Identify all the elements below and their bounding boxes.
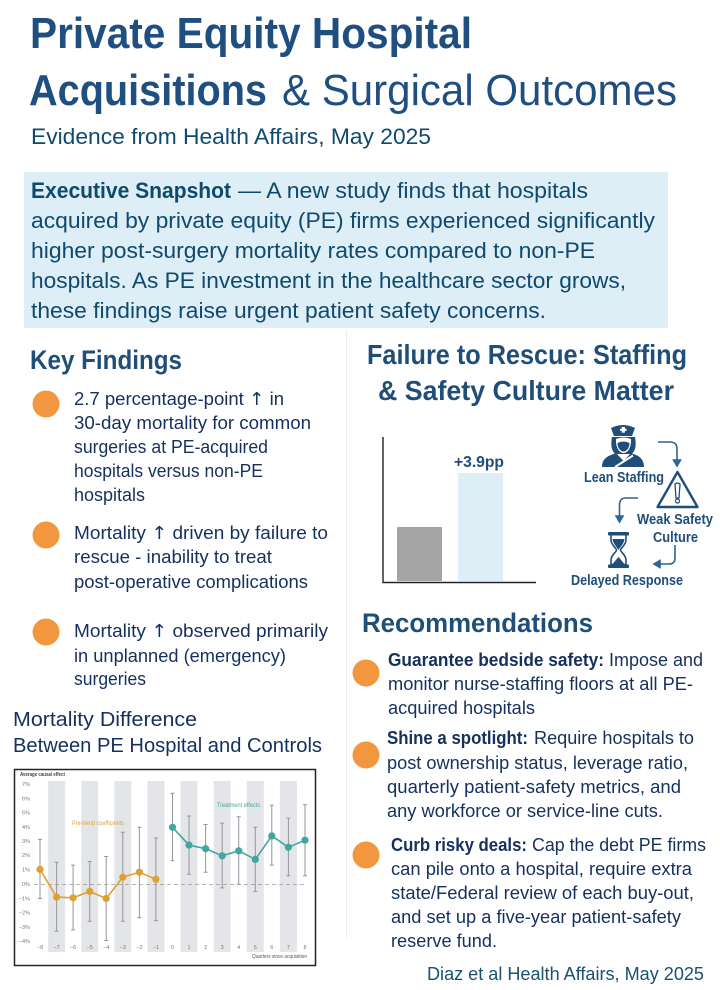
title: & Surgical Outcomes xyxy=(282,66,677,115)
y axis labels: −1% xyxy=(19,896,30,902)
panel: executive snapshot: acquired by private equity (PE) firms experienced significantly xyxy=(31,208,656,233)
series: treatment effects xyxy=(169,803,309,863)
diagram: failure to rescue cycle xyxy=(571,425,713,589)
recommendation 3: and set up a five-year patient-safety xyxy=(391,907,681,927)
y axis labels: 5% xyxy=(22,810,30,816)
error bars xyxy=(38,793,307,940)
line chart: average causal effect by quarter: Average causal effect xyxy=(20,772,65,778)
x axis labels: −4 xyxy=(103,945,109,951)
x axis labels: −5 xyxy=(87,945,93,951)
recommendation 1 xyxy=(352,650,703,718)
y axis labels: 0% xyxy=(22,882,30,888)
series: pre-trend coefficients xyxy=(36,821,159,902)
x axis labels: 2 xyxy=(204,945,207,951)
finding 1: hospitals xyxy=(74,485,145,505)
label: delayed response: Delayed Response xyxy=(571,573,683,589)
y axis labels: 1% xyxy=(22,868,30,874)
recommendation 1: monitor nurse-staffing floors at all PE- xyxy=(388,674,693,694)
heading: key findings: Key Findings xyxy=(30,345,182,375)
finding 3: surgeries xyxy=(74,669,146,689)
x axis labels: −3 xyxy=(120,945,126,951)
panel: key findings xyxy=(30,345,328,689)
title xyxy=(29,9,677,115)
heading: failure to rescue xyxy=(367,339,687,406)
source citation: Diaz et al Health Affairs, May 2025 xyxy=(427,963,704,984)
icon: hourglass xyxy=(608,532,629,568)
recommendation 3: can pile onto a hospital, require extra xyxy=(391,859,693,879)
panel: recommendations xyxy=(352,608,706,951)
y axis labels: 3% xyxy=(22,839,30,845)
arrow: staffing to culture xyxy=(658,442,680,466)
bar chart: +3.9pp xyxy=(383,437,536,582)
finding 1: surgeries at PE-acquired xyxy=(74,437,268,457)
finding 3 xyxy=(32,618,328,689)
icon: nurse xyxy=(602,425,644,467)
series: treatment effects: Treatment effects xyxy=(217,803,260,809)
bar chart: +3.9pp: +3.9pp xyxy=(454,454,504,471)
title: Acquisitions xyxy=(29,66,267,115)
recommendation 3: state/Federal review of each buy-out, xyxy=(391,883,694,903)
y axis labels: 7% xyxy=(22,782,30,788)
finding 1: hospitals versus non-PE xyxy=(74,461,263,481)
label: lean staffing: Lean Staffing xyxy=(584,470,664,486)
y axis labels xyxy=(19,782,30,945)
panel: executive snapshot: these findings raise urgent patient safety concerns. xyxy=(31,298,546,323)
subtitle: Evidence from Health Affairs, May 2025 xyxy=(31,124,431,149)
arrow: response loop xyxy=(654,545,675,568)
label: weak safety culture: Culture xyxy=(653,530,698,546)
finding 3: Mortality ↑ observed primarily xyxy=(74,621,328,642)
panel: executive snapshot: Executive Snapshot xyxy=(31,178,231,203)
heading: recommendations: Recommendations xyxy=(362,608,593,638)
y axis labels: 2% xyxy=(22,853,30,859)
y axis labels: 6% xyxy=(22,796,30,802)
panel: executive snapshot: — A new study finds that hospitals xyxy=(238,178,588,203)
panel: executive snapshot xyxy=(24,172,668,328)
x axis labels: 6 xyxy=(270,945,273,951)
x axis labels: −7 xyxy=(53,945,60,951)
x axis labels: 3 xyxy=(221,945,224,951)
finding 1 xyxy=(32,389,311,505)
y axis labels: −3% xyxy=(19,925,30,931)
panel: executive snapshot: higher post-surgery mortality rates compared to non-PE xyxy=(31,238,595,263)
recommendation 2 xyxy=(352,728,694,821)
recommendation 1: acquired hospitals xyxy=(388,698,535,718)
recommendation 3: reserve fund. xyxy=(391,931,497,951)
x axis labels: 1 xyxy=(187,945,191,951)
finding 2: rescue - inability to treat xyxy=(74,547,272,567)
finding 2: Mortality ↑ driven by failure to xyxy=(74,523,328,544)
chart title: Between PE Hospital and Controls xyxy=(13,734,322,757)
x axis labels xyxy=(37,945,307,951)
x axis labels: −1 xyxy=(153,945,159,951)
x axis labels: 4 xyxy=(237,945,240,951)
finding 2 xyxy=(32,522,328,592)
recommendation 2: Require hospitals to xyxy=(534,728,694,748)
x axis labels: 5 xyxy=(254,945,257,951)
label: weak safety culture: Weak Safety xyxy=(637,512,713,528)
recommendation 2: quarterly patient-safety metrics, and xyxy=(387,777,681,797)
arrow: culture to response xyxy=(616,498,638,522)
recommendation 3: Curb risky deals: xyxy=(391,835,527,855)
heading: failure to rescue: Failure to Rescue: Staffing xyxy=(367,339,687,370)
y axis labels: −4% xyxy=(19,939,30,945)
recommendation 3: Cap the debt PE firms xyxy=(532,835,706,855)
finding 2: post-operative complications xyxy=(74,572,308,592)
y axis labels: 4% xyxy=(22,825,30,831)
x axis labels: 0 xyxy=(171,945,174,951)
recommendation 2: Shine a spotlight: xyxy=(387,728,528,748)
x axis labels: −8 xyxy=(37,945,43,951)
icon: warning triangle xyxy=(658,472,698,507)
recommendation 1: Impose and xyxy=(609,650,703,670)
line chart: average causal effect by quarter: Quarters since acquisition xyxy=(252,954,307,960)
recommendation 2: post ownership status, leverage ratio, xyxy=(387,753,688,773)
panel: executive snapshot: hospitals. As PE investment in the healthcare sector grows, xyxy=(31,268,626,293)
label: weak safety culture xyxy=(637,512,713,546)
recommendation 2: any workforce or service-line cuts. xyxy=(387,801,663,821)
x axis labels: −6 xyxy=(70,945,76,951)
finding 1: 30-day mortality for common xyxy=(74,413,311,433)
x axis labels: −2 xyxy=(136,945,143,951)
recommendation 1: Guarantee bedside safety: xyxy=(388,650,604,670)
title: Private Equity Hospital xyxy=(30,9,472,58)
heading: failure to rescue: & Safety Culture Matter xyxy=(378,375,674,406)
line chart: average causal effect by quarter xyxy=(14,770,316,966)
chart title: Mortality Difference xyxy=(13,708,197,731)
finding 3: in unplanned (emergency) xyxy=(74,646,286,666)
recommendation 3 xyxy=(352,835,706,951)
x axis labels: 7 xyxy=(287,945,290,951)
finding 1: 2.7 percentage-point ↑ in xyxy=(74,389,284,410)
series: pre-trend coefficients: Pre-trend coefficients xyxy=(72,821,124,827)
x axis labels: 8 xyxy=(303,945,307,951)
y axis labels: −2% xyxy=(19,911,30,917)
chart title xyxy=(13,708,322,757)
